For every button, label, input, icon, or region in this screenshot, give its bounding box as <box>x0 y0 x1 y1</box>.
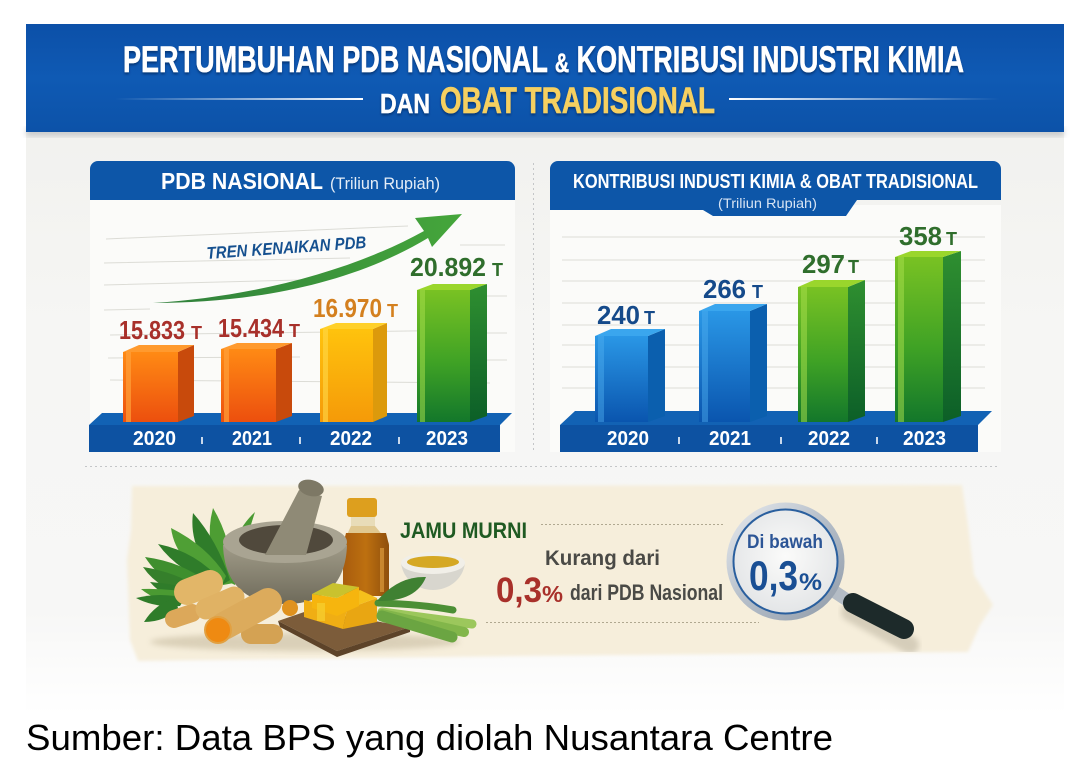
bar 2021: 15.434 <box>218 313 284 343</box>
bar 2021 <box>699 274 767 422</box>
panel header: KONTRIBUSI INDUSTI KIMIA & OBAT TRADISIONAL <box>573 171 978 193</box>
bar 2020: T <box>191 323 202 343</box>
bar 2021 <box>218 313 300 422</box>
year labels: 2021 <box>232 428 272 450</box>
year labels: 2020 <box>607 428 649 450</box>
bar 2022: 16.970 <box>313 293 382 323</box>
year labels: 2022 <box>330 428 372 450</box>
year labels <box>607 428 946 450</box>
bar 2022: T <box>848 257 859 277</box>
bar 2023: 20.892 <box>410 252 486 282</box>
title banner <box>26 24 1064 136</box>
bar 2020: 15.833 <box>119 315 185 345</box>
text: Kurang dari: Kurang dari <box>545 547 660 570</box>
panel: PDB Nasional <box>89 161 515 452</box>
text: 0,3% dari PDB Nasional: 0,3 <box>496 571 542 610</box>
year labels: 2023 <box>903 428 946 450</box>
bar 2020: T <box>644 308 655 328</box>
icon: bottle of jamu <box>343 498 389 596</box>
trend arrow <box>153 214 462 303</box>
icon: turmeric roots <box>174 583 298 643</box>
panel: Kontribusi Industri <box>550 161 1001 452</box>
base platform <box>89 413 512 452</box>
bar 2022 <box>798 249 865 422</box>
panel header <box>550 161 1001 216</box>
icon: yellow jamu cubes <box>304 583 377 629</box>
source caption: Sumber: Data BPS yang diolah Nusantara Centre <box>26 717 833 758</box>
bar 2023 <box>895 221 961 422</box>
bar 2022: 297 <box>802 249 845 279</box>
bar 2023 <box>410 252 503 422</box>
bar 2022: T <box>387 301 398 321</box>
bar 2020: 240 <box>597 300 640 330</box>
panel header: PDB NASIONAL <box>161 168 323 194</box>
icon: magnifying glass: 0,3 <box>749 552 798 599</box>
text: 0,3% dari PDB Nasional: dari PDB Nasional <box>570 580 723 605</box>
text: 0,3% dari PDB Nasional <box>496 571 723 610</box>
year labels: 2023 <box>426 428 468 450</box>
year labels: 2020 <box>133 428 176 450</box>
icon: mortar and pestle <box>223 477 347 604</box>
bar 2022 <box>313 293 398 422</box>
panel header <box>90 161 515 200</box>
panel header: (Triliun Rupiah) <box>330 174 440 193</box>
title banner: DAN <box>380 88 430 119</box>
bar 2023: 358 <box>899 221 942 251</box>
bar 2021: 266 <box>703 274 746 304</box>
year labels <box>133 428 468 450</box>
text: 0,3% dari PDB Nasional: % <box>542 581 563 607</box>
icon: lemongrass <box>377 577 472 637</box>
icon: magnifying glass: % <box>799 569 822 596</box>
icon: palm leaves <box>136 508 255 622</box>
bar 2023: T <box>492 260 503 280</box>
panel: Jamu Murni band <box>127 477 993 661</box>
bar 2021: T <box>289 321 300 341</box>
icon: magnifying glass: Di bawah <box>747 532 823 553</box>
bar 2020 <box>119 315 202 422</box>
illustration: jamu ingredients <box>136 477 472 657</box>
icon: wooden board <box>278 610 410 657</box>
year labels: 2021 <box>709 428 751 450</box>
trend arrow: TREN KENAIKAN PDB <box>206 233 367 263</box>
title banner: OBAT TRADISIONAL <box>440 80 715 121</box>
bar 2021: T <box>752 282 763 302</box>
heading: Jamu Murni: JAMU MURNI <box>400 518 527 543</box>
base platform <box>560 411 992 452</box>
bar 2023: T <box>946 229 957 249</box>
panel header: (Triliun Rupiah) <box>718 195 817 211</box>
bar 2020 <box>595 300 665 422</box>
year labels: 2022 <box>808 428 850 450</box>
icon: bowl of jamu <box>401 552 465 590</box>
icon: magnifying glass <box>726 502 910 645</box>
